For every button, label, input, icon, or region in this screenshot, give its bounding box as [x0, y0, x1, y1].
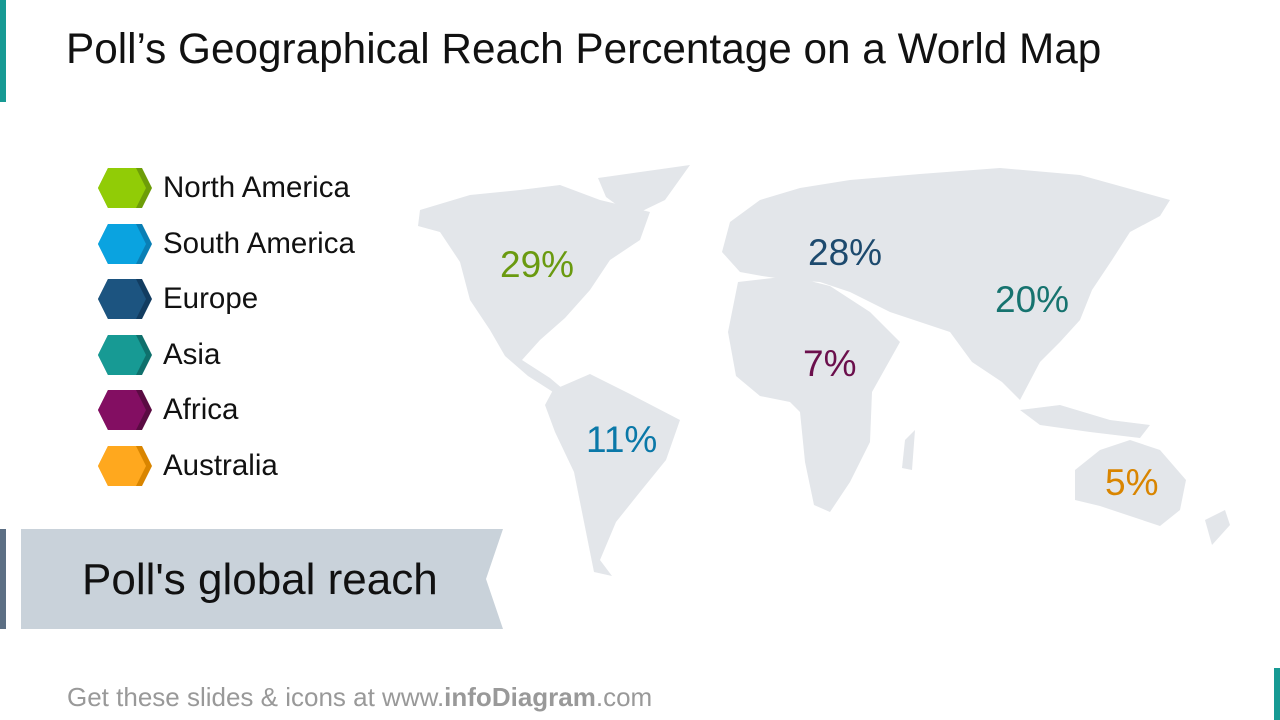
- legend: North America: North America: [163, 171, 350, 204]
- banner: Poll's global reach: [21, 529, 503, 629]
- legend: Europe: Europe: [163, 282, 258, 315]
- legend: [98, 168, 355, 486]
- legend: Asia: [98, 335, 220, 375]
- title: Poll’s Geographical Reach Percentage on a World Map: [66, 25, 1101, 72]
- side bar: [0, 529, 6, 629]
- text: 28%: [808, 232, 882, 273]
- text: 11%: [586, 419, 657, 460]
- legend: Australia: Australia: [163, 449, 278, 482]
- accent bar: [0, 0, 6, 102]
- legend: Australia: [98, 446, 278, 486]
- legend: South America: South America: [163, 227, 355, 260]
- legend: Europe: [98, 279, 258, 319]
- corner accent: [1274, 668, 1280, 720]
- legend: North America: [98, 168, 350, 208]
- percentages: 29%: [500, 244, 574, 285]
- legend: Africa: [98, 390, 238, 430]
- text: 20%: [995, 279, 1069, 320]
- footer: Get these slides & icons at www.infoDiagram.com: [67, 682, 652, 712]
- legend: Africa: Africa: [163, 393, 238, 426]
- legend: South America: [98, 224, 355, 264]
- text: 7%: [803, 343, 856, 384]
- legend: Asia: Asia: [163, 338, 220, 371]
- banner: Poll's global reach: Poll's global reach: [82, 555, 438, 604]
- text: 5%: [1105, 462, 1158, 503]
